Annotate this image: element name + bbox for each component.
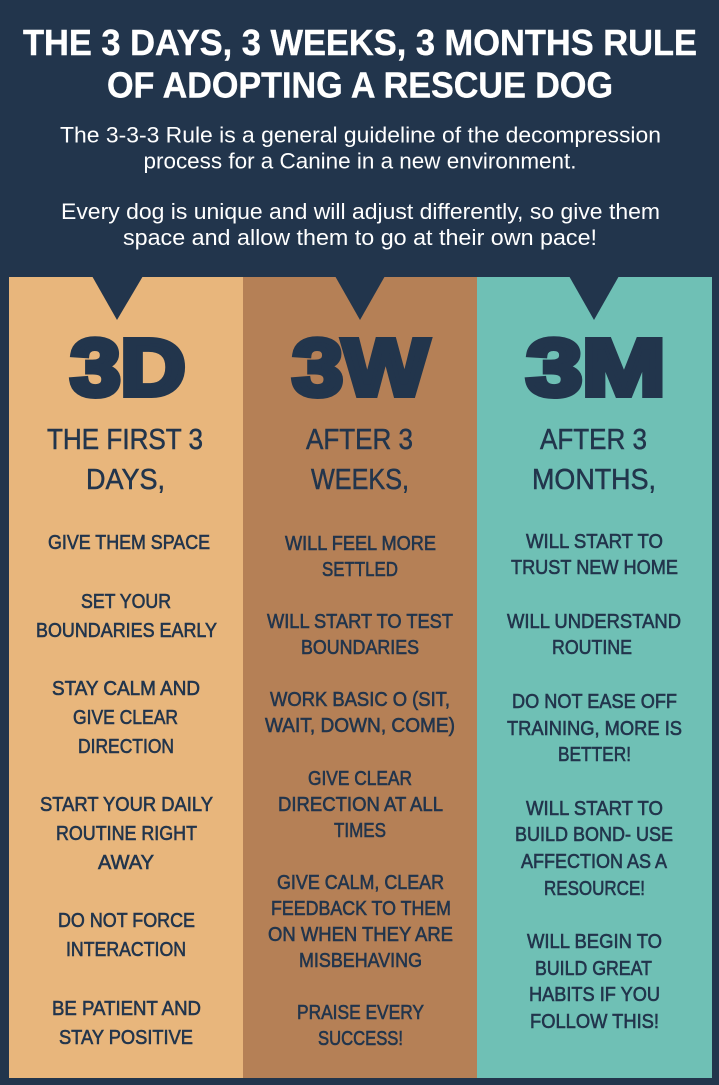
list: after 3 months advice	[507, 531, 682, 1033]
list: after 3 weeks advice: FEEDBACK TO THEM	[271, 898, 451, 920]
list: first 3 days advice: STAY CALM AND	[52, 678, 200, 700]
intro text	[60, 122, 661, 250]
intro text: process for a Canine in a new environment.	[144, 148, 576, 174]
list: after 3 weeks advice: MISBEHAVING	[299, 950, 422, 972]
big label 3W: 3W	[292, 323, 429, 412]
panel: 3 days	[9, 276, 243, 1078]
list: after 3 weeks advice: SUCCESS!	[318, 1028, 403, 1050]
list: after 3 weeks advice: GIVE CLEAR	[308, 768, 412, 790]
list: after 3 months advice: WILL BEGIN TO	[527, 931, 662, 953]
list: after 3 weeks advice: WAIT, DOWN, COME)	[265, 715, 455, 737]
list: first 3 days advice: AWAY	[98, 852, 154, 874]
panel: 3 months	[477, 276, 712, 1078]
icon: pointer triangle 3W	[335, 276, 385, 320]
list: first 3 days advice	[36, 532, 217, 1049]
icon: pointer triangle 3D	[92, 276, 143, 320]
list: after 3 months advice: WILL START TO	[526, 531, 663, 553]
intro text: Every dog is unique and will adjust differently, so give them	[61, 199, 660, 224]
list: after 3 weeks advice: PRAISE EVERY	[297, 1002, 424, 1024]
list: after 3 weeks advice: ON WHEN THEY ARE	[268, 924, 453, 946]
title	[23, 22, 697, 106]
list: after 3 months advice: BETTER!	[558, 744, 631, 766]
list: after 3 months advice: TRUST NEW HOME	[511, 557, 678, 579]
list: after 3 months advice: HABITS IF YOU	[529, 984, 660, 1006]
list: first 3 days advice: DIRECTION	[78, 736, 174, 758]
list: after 3 weeks advice: WILL START TO TEST	[267, 611, 453, 633]
intro text: space and allow them to go at their own pace!	[123, 225, 597, 250]
heading: after 3 months: MONTHS,	[532, 464, 656, 496]
list: first 3 days advice: DO NOT FORCE	[58, 910, 195, 932]
list: after 3 months advice: TRAINING, MORE IS	[507, 718, 682, 740]
heading: the first 3 days	[47, 424, 203, 496]
list: after 3 months advice: WILL UNDERSTAND	[507, 611, 681, 633]
list: after 3 months advice: DO NOT EASE OFF	[512, 691, 677, 713]
list: first 3 days advice: BOUNDARIES EARLY	[36, 620, 217, 642]
title: THE 3 DAYS, 3 WEEKS, 3 MONTHS RULE	[23, 22, 697, 63]
big label 3M: 3M	[526, 323, 666, 412]
heading: after 3 weeks	[306, 424, 413, 496]
list: after 3 weeks advice: WILL FEEL MORE	[285, 533, 436, 555]
title: OF ADOPTING A RESCUE DOG	[107, 64, 613, 106]
heading: after 3 weeks: WEEKS,	[311, 464, 409, 496]
list: after 3 weeks advice	[265, 533, 455, 1050]
list: first 3 days advice: STAY POSITIVE	[59, 1027, 193, 1049]
list: after 3 months advice: WILL START TO	[526, 798, 663, 820]
icon: pointer triangle 3M	[569, 276, 619, 320]
big label 3D: 3D	[70, 323, 186, 412]
list: after 3 weeks advice: WORK BASIC O (SIT,	[270, 689, 450, 711]
heading: after 3 months: AFTER 3	[540, 424, 647, 456]
list: after 3 weeks advice: TIMES	[334, 820, 386, 842]
intro text: The 3-3-3 Rule is a general guideline of the decompression	[60, 122, 661, 148]
list: after 3 months advice: AFFECTION AS A	[521, 851, 668, 873]
list: after 3 months advice: FOLLOW THIS!	[530, 1011, 659, 1033]
list: after 3 months advice: BUILD BOND- USE	[515, 824, 673, 846]
list: first 3 days advice: SET YOUR	[81, 591, 171, 613]
list: first 3 days advice: START YOUR DAILY	[40, 794, 213, 816]
list: after 3 months advice: BUILD GREAT	[535, 958, 652, 980]
list: first 3 days advice: BE PATIENT AND	[52, 998, 201, 1020]
list: after 3 months advice: ROUTINE	[552, 637, 632, 659]
list: first 3 days advice: INTERACTION	[66, 939, 186, 961]
list: first 3 days advice: ROUTINE RIGHT	[56, 823, 197, 845]
list: after 3 weeks advice: GIVE CALM, CLEAR	[277, 872, 444, 894]
list: first 3 days advice: GIVE THEM SPACE	[48, 532, 210, 554]
heading: the first 3 days: THE FIRST 3	[47, 424, 203, 456]
list: after 3 weeks advice: SETTLED	[322, 559, 398, 581]
list: after 3 weeks advice: DIRECTION AT ALL	[278, 794, 443, 816]
list: after 3 months advice: RESOURCE!	[544, 878, 645, 900]
heading: the first 3 days: DAYS,	[86, 464, 165, 496]
list: first 3 days advice: GIVE CLEAR	[73, 707, 178, 729]
panel: 3 weeks	[243, 276, 477, 1078]
heading: after 3 weeks: AFTER 3	[306, 424, 413, 456]
list: after 3 weeks advice: BOUNDARIES	[301, 637, 419, 659]
heading: after 3 months	[532, 424, 656, 496]
